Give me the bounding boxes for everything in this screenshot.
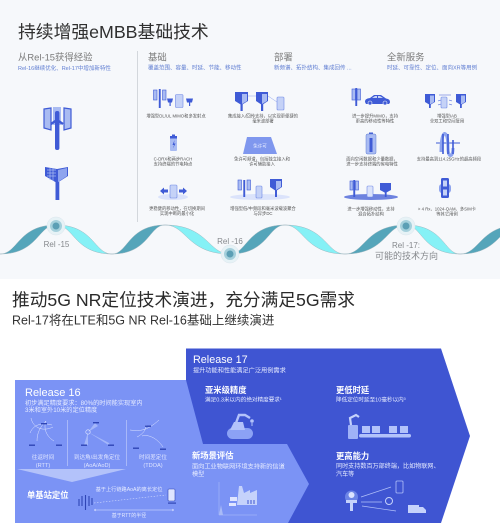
- icon: factory: [219, 482, 257, 515]
- item: idle data battery: [346, 132, 398, 168]
- milestone: Rel-17: Rel -17:: [392, 241, 420, 250]
- item: robust mobility: [149, 185, 205, 217]
- item: high frequency band: 支持最高到114.25GHz的超高频段: [417, 156, 482, 162]
- item: carrier aggregation: [230, 179, 297, 217]
- item: enhanced MIMO mobility: 更高的移动性等特性: [356, 118, 395, 124]
- item: robust mobility: 更稳健的移动性，在切换期间: [149, 205, 205, 212]
- diagram: AoA/AoD: [74, 422, 121, 469]
- heading: deployment: [274, 52, 352, 72]
- item: robust mobility: 实现中断的最小化: [160, 210, 195, 217]
- block: single-site positioning: 单基站定位: [27, 490, 68, 500]
- diagram: AoA/AoD: (AoA/AoD): [84, 463, 111, 469]
- item: high frequency band: [417, 133, 482, 162]
- item: C-DRX battery: 支持终端的节电特点: [154, 160, 193, 168]
- divider: [137, 51, 138, 222]
- milestone: Rel-15: [44, 217, 70, 249]
- funnel arrow: [17, 469, 126, 482]
- icon: large cube antenna: [45, 167, 68, 200]
- item: idle data battery: 进一步支持终端的省电特性: [346, 160, 398, 168]
- item: enhanced MIMO: 增强型DL/UL MIMO和多发射点: [146, 112, 206, 120]
- panel: Release 17: Release 17: [193, 354, 248, 366]
- block: single-site positioning: [27, 485, 176, 519]
- heading: new services: [387, 52, 478, 72]
- item: enhanced IAB: 增强型IAB: [437, 112, 457, 120]
- item: enhanced MIMO mobility: 进一步提升MIMO，支持: [352, 112, 399, 120]
- panel: Release 17: [186, 348, 470, 523]
- item: enhanced IAB: [425, 94, 466, 124]
- block: single-site positioning: 基于上行链路AoA的离长定位: [96, 485, 162, 493]
- block: sub-meter accuracy: [205, 385, 282, 439]
- wave timeline: [0, 225, 500, 254]
- diagram: TDOA: [130, 420, 167, 469]
- block: new scenario evaluation: 新场景评估: [192, 450, 234, 460]
- diagram: RTT: 往返时间: [32, 453, 55, 461]
- item: idle data battery: 面向空闲数据和少量数据，: [346, 156, 398, 162]
- icon: large antenna: [44, 107, 71, 150]
- item: hybrid topology: [344, 180, 398, 218]
- item: unlicensed spectrum: [234, 137, 290, 168]
- milestone: Rel-17: [375, 217, 438, 261]
- diagram: RTT: (RTT): [36, 463, 50, 469]
- item: C-DRX battery: C-DRX和两步RACH: [154, 156, 192, 162]
- item: unlicensed spectrum: 许可辅助接入: [249, 160, 276, 168]
- milestone: Rel-16: [217, 237, 243, 263]
- item: integrated access backhaul: 毫米波部署: [252, 118, 274, 124]
- column: Rel-15 experience: 从Rel-15获得经验: [18, 52, 93, 62]
- panel: eMBB top section: [0, 0, 500, 279]
- panel: Release 16: 3米和室外10米的定位精度: [25, 406, 97, 414]
- item: multi SIM: > 4 Rx、1024-QAM、多SIM卡: [418, 206, 477, 212]
- icon: conveyor robot: [348, 415, 411, 439]
- item: unlicensed spectrum: 免许可频谱，包括独立接入和: [234, 156, 290, 162]
- item: integrated access backhaul: 集成接入/回传支持，以实现更便捷的: [228, 112, 298, 120]
- heading: deployment: 部署: [274, 52, 293, 62]
- heading: foundation: [148, 52, 242, 72]
- diagram: RTT: [29, 418, 62, 469]
- panel: Release 16: [15, 380, 309, 523]
- item: multi SIM: [418, 178, 477, 218]
- item: hybrid topology: 进一步增强移动性，支持: [347, 206, 395, 212]
- item: carrier aggregation: 与异步DC: [253, 210, 273, 217]
- item: enhanced IAB: 全双工和空间复用: [430, 118, 464, 124]
- column: Rel-15 experience: Rel-16继续优化、Rel-17中增加新特性: [18, 64, 111, 72]
- icon: device connections: [345, 481, 426, 513]
- diagram: AoA/AoD: 到达角/出发角定位: [74, 453, 121, 461]
- block: single-site positioning: 基于RTT的半径: [112, 512, 146, 519]
- block: higher capacity: 同时支持数百万部终端，比如物联网、: [336, 462, 440, 470]
- panel: Release 17: 提升功能和性能满足广泛用例需求: [193, 366, 286, 374]
- heading: new services: 时延、可靠性、定位、面向XR等用例: [387, 64, 478, 72]
- block: sub-meter accuracy: 满足0.3米以内的绝对精度要求¹: [205, 396, 282, 404]
- diagram: TDOA: (TDOA): [143, 463, 163, 469]
- heading: new services: 全新服务: [387, 52, 425, 62]
- block: new scenario evaluation: [192, 450, 285, 515]
- item: carrier aggregation: 增强型低/中频段和毫米波载波聚合: [230, 205, 297, 212]
- item: enhanced MIMO: [146, 89, 206, 120]
- subheading: positioning: Rel-17将在LTE和5G NR Rel-16基础上继续演进: [12, 312, 275, 328]
- title: 持续增强eMBB基础技术: [18, 22, 209, 42]
- block: higher capacity: [336, 451, 440, 513]
- block: lower latency: [336, 385, 411, 439]
- item: enhanced MIMO mobility: [352, 88, 399, 124]
- block: higher capacity: 汽车等: [336, 470, 354, 478]
- heading: deployment: 新频谱、拓扑结构、集成回传 ...: [274, 64, 352, 72]
- block: higher capacity: 更高能力: [336, 451, 369, 461]
- heading: foundation: 覆盖范围、容量、时延、节能、移动性: [148, 64, 242, 72]
- milestone: Rel-17: 可能的技术方向: [375, 250, 438, 261]
- block: lower latency: 更低时延: [336, 385, 370, 395]
- block: sub-meter accuracy: 亚米级精度: [205, 385, 247, 395]
- column: Rel-15 experience: [18, 52, 111, 200]
- item: unlicensed spectrum: 免许可: [253, 142, 267, 150]
- milestone: Rel-15: Rel -15: [44, 240, 70, 249]
- icon: robot: [227, 415, 254, 439]
- heading: foundation: 基础: [148, 52, 167, 62]
- panel: Release 16: 初步满足精度要求：80%的时间能实现室内: [25, 399, 143, 407]
- block: new scenario evaluation: 面向工业物联网环境支持新的信道: [192, 462, 285, 470]
- block: new scenario evaluation: 模型: [192, 470, 204, 478]
- item: hybrid topology: 混合拓扑结构: [358, 210, 385, 218]
- item: C-DRX battery: [154, 134, 193, 168]
- block: lower latency: 降低定位时延至10毫秒以内³: [336, 396, 406, 404]
- heading: positioning: 推动5G NR定位技术演进，充分满足5G需求: [12, 290, 355, 310]
- diagram: TDOA: 时间差定位: [139, 453, 167, 461]
- item: integrated access backhaul: [228, 92, 298, 124]
- milestone: Rel-16: Rel -16: [217, 237, 243, 246]
- panel: Release 16: Release 16: [25, 387, 81, 399]
- item: multi SIM: 等其它用例: [436, 210, 458, 218]
